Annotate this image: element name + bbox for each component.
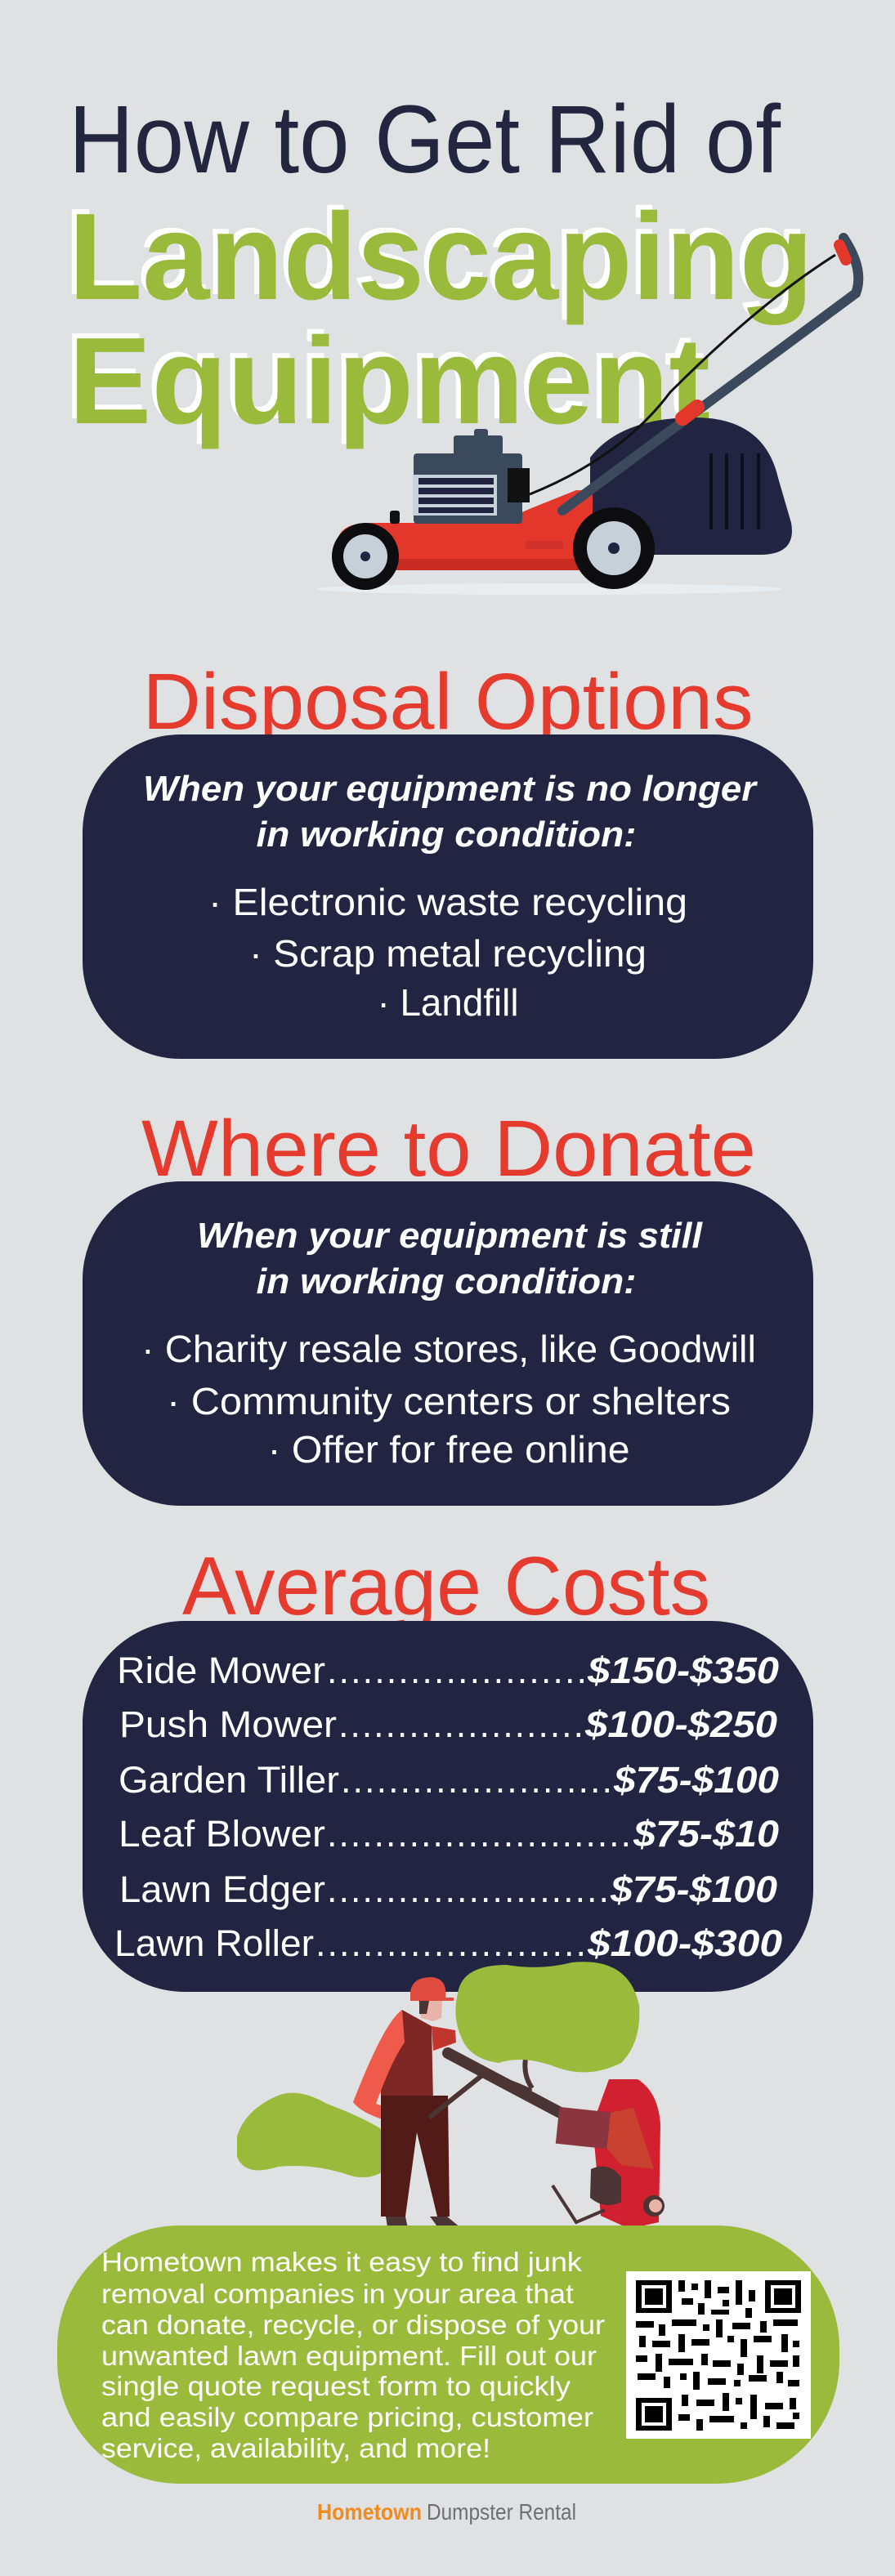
row: garden tiller: ....................... bbox=[341, 1759, 612, 1801]
row: lawn roller bbox=[114, 1922, 782, 1964]
row: lawn roller: ....................... bbox=[315, 1922, 586, 1964]
panel: call to action: service, availability, and more! bbox=[101, 2433, 490, 2463]
title bbox=[64, 86, 813, 449]
row: garden tiller bbox=[119, 1759, 779, 1801]
row: garden tiller: $75-$100 bbox=[613, 1759, 779, 1801]
title: Landscaping bbox=[64, 182, 808, 320]
row: push mower bbox=[119, 1703, 777, 1745]
row: push mower: ..................... bbox=[338, 1703, 584, 1745]
row: ride mower bbox=[117, 1650, 779, 1691]
man bbox=[353, 1977, 466, 2232]
footer logo: Dumpster Rental bbox=[427, 2499, 576, 2525]
illustration: gardener with wood chipper bbox=[237, 1962, 665, 2232]
panel: where to donate bbox=[83, 1181, 813, 1506]
row: ride mower: Ride Mower bbox=[117, 1650, 325, 1691]
panel: call to action: Hometown makes it easy to find junk bbox=[101, 2247, 583, 2277]
panel: disposal options bbox=[83, 734, 813, 1059]
title: Equipment bbox=[64, 306, 705, 444]
panel: disposal options: · Landfill bbox=[378, 981, 518, 1024]
row: ride mower: $150-$350 bbox=[587, 1650, 779, 1691]
row: leaf blower: Leaf Blower bbox=[119, 1813, 325, 1855]
row: leaf blower: .......................... bbox=[327, 1813, 631, 1855]
row: lawn roller: Lawn Roller bbox=[114, 1922, 314, 1964]
panel: where to donate: When your equipment is still bbox=[197, 1216, 703, 1256]
title: Landscaping bbox=[69, 187, 813, 325]
heading: Disposal Options: Disposal Options bbox=[142, 657, 753, 746]
row: lawn roller: $100-$300 bbox=[587, 1922, 782, 1964]
title: How to Get Rid of bbox=[69, 86, 781, 194]
panel: disposal options: in working condition: bbox=[257, 815, 636, 855]
panel: disposal options: · Scrap metal recycling bbox=[249, 932, 647, 975]
heading: Average Costs: Average Costs bbox=[182, 1541, 710, 1632]
heading: Where to Donate: Where to Donate bbox=[141, 1104, 756, 1193]
row: lawn edger: ........................ bbox=[327, 1868, 609, 1910]
row: lawn edger: Lawn Edger bbox=[119, 1868, 325, 1910]
bush bbox=[237, 2093, 386, 2177]
panel: disposal options: When your equipment is no longer bbox=[143, 769, 759, 809]
row: leaf blower bbox=[119, 1813, 779, 1855]
row: push mower: $100-$250 bbox=[584, 1703, 777, 1745]
row: push mower: Push Mower bbox=[119, 1703, 337, 1745]
row: garden tiller: Garden Tiller bbox=[119, 1759, 339, 1801]
panel: where to donate: · Offer for free online bbox=[268, 1428, 629, 1471]
title: Equipment bbox=[69, 311, 710, 449]
panel: where to donate: · Charity resale stores, like Goodwill bbox=[141, 1328, 756, 1370]
panel: call to action: unwanted lawn equipment. Fill out our bbox=[101, 2341, 597, 2371]
panel: where to donate: in working condition: bbox=[257, 1261, 636, 1301]
panel: call to action bbox=[57, 2226, 839, 2484]
row: lawn edger: $75-$100 bbox=[610, 1868, 777, 1910]
row: lawn edger bbox=[119, 1868, 777, 1910]
row: ride mower: ...................... bbox=[327, 1650, 587, 1691]
panel: call to action: removal companies in your area that bbox=[101, 2279, 574, 2309]
panel: average costs table bbox=[83, 1621, 813, 1992]
panel: where to donate: · Community centers or shelters bbox=[167, 1380, 731, 1422]
panel: disposal options: · Electronic waste recycling bbox=[208, 881, 687, 923]
tree bbox=[455, 1962, 639, 2088]
icon: lawn mower bbox=[316, 238, 858, 595]
footer logo: Hometown bbox=[317, 2499, 422, 2525]
footer logo bbox=[317, 2499, 576, 2525]
row: leaf blower: $75-$10 bbox=[633, 1813, 779, 1855]
panel: call to action: can donate, recycle, or dispose of your bbox=[101, 2310, 605, 2340]
wood chipper bbox=[429, 2053, 665, 2229]
QR code bbox=[626, 2271, 811, 2439]
panel: call to action: and easily compare pricing, customer bbox=[101, 2402, 593, 2432]
panel: call to action: single quote request form to quickly bbox=[101, 2371, 571, 2401]
